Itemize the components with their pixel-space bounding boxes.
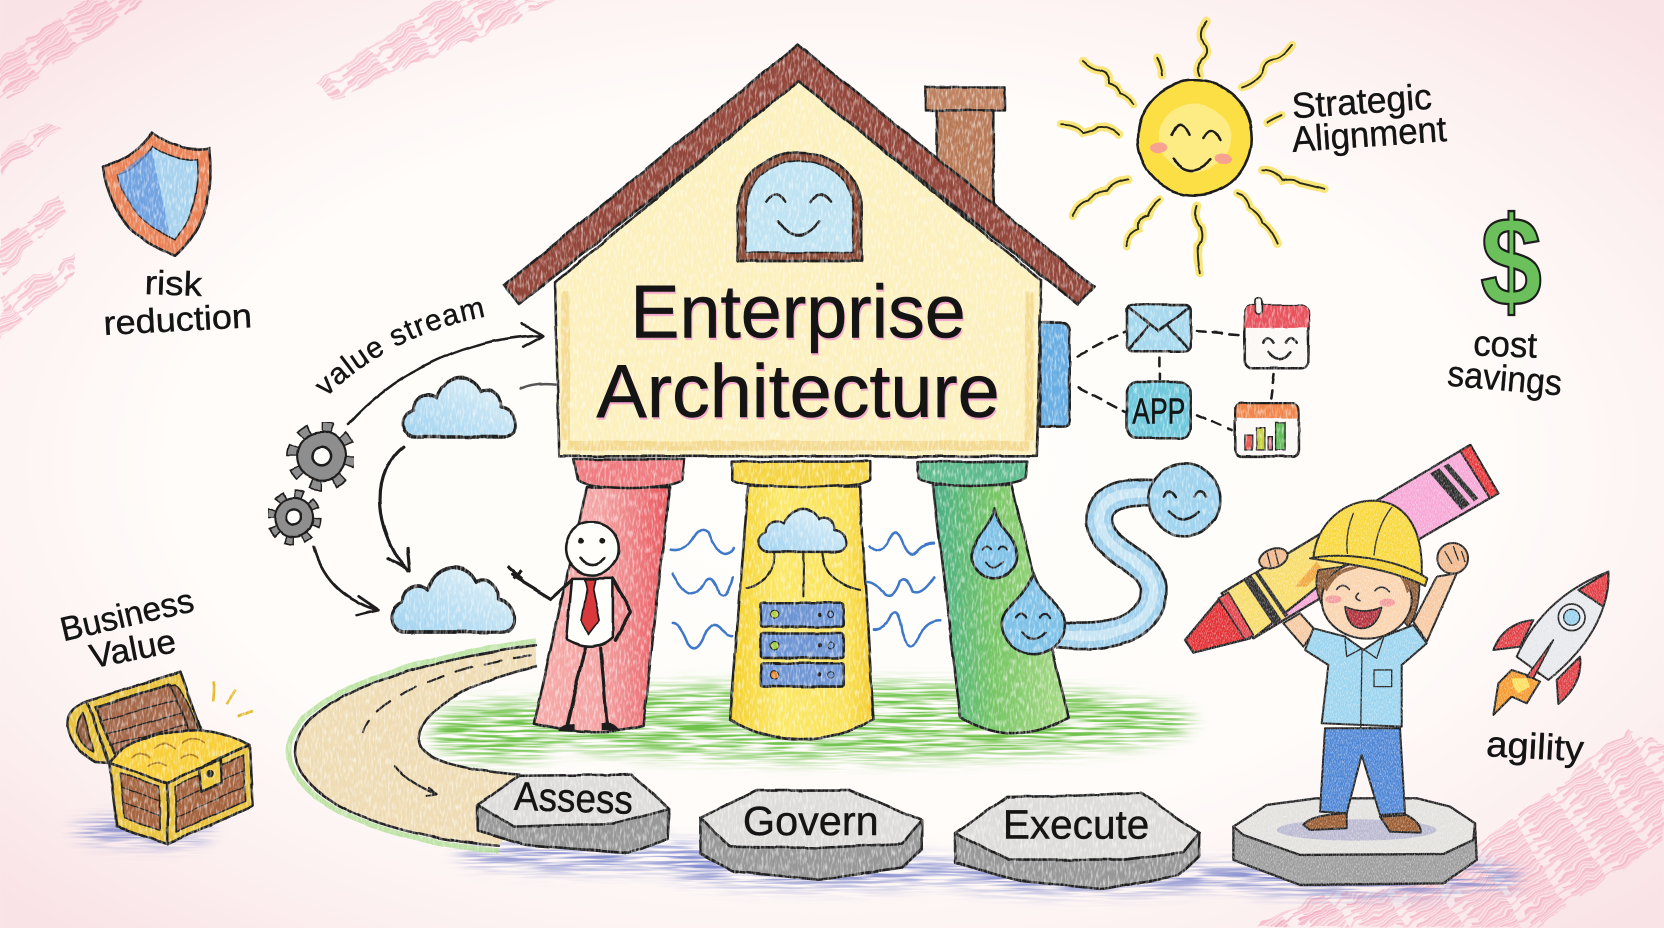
icon: treasure chest (68, 672, 253, 844)
stepping stone: assess (478, 773, 670, 853)
figure: builder with giant crayon on a stone (1185, 445, 1498, 885)
icon: server rack (761, 603, 844, 687)
label: business value: Value (86, 622, 179, 676)
label: strategic alignment: Alignment (1290, 108, 1448, 160)
boy head with hard hat (1295, 501, 1427, 639)
giant crayon (1185, 445, 1498, 653)
blue connector port (1040, 323, 1070, 427)
boy body: shirt and pants (1303, 625, 1427, 833)
panel: house (504, 45, 1094, 456)
stone shape (700, 791, 922, 880)
title: Enterprise (630, 269, 966, 353)
icon: app tile (1127, 382, 1191, 438)
ground: stone shadows (74, 818, 1523, 895)
label: govern: Govern (743, 798, 879, 844)
label: strategic alignment: Strategic (1290, 76, 1433, 126)
boy arms and hands (1256, 543, 1468, 647)
arrows to lower cloud (314, 446, 410, 615)
blue signal waves (671, 530, 940, 648)
label: risk reduction (103, 264, 253, 343)
panel: house pillars (534, 459, 1069, 740)
icon: bar chart window (1235, 403, 1299, 456)
ground: grass (430, 683, 1194, 762)
stone platform (1233, 798, 1477, 885)
icon: cloud on yellow pillar (747, 509, 860, 596)
dashed connectors (1078, 331, 1275, 430)
house wall (555, 81, 1041, 456)
chimney (925, 87, 1005, 207)
label: cost savings (1446, 322, 1564, 403)
arrow: value stream to house (348, 324, 556, 424)
icon: smiling sun (1061, 21, 1324, 274)
panel: business value (57, 582, 253, 844)
label: assess: Assess (513, 773, 634, 823)
label: cost savings: cost (1473, 322, 1538, 366)
label: risk reduction: reduction (103, 297, 253, 343)
label: risk reduction: risk (144, 264, 204, 304)
label: value stream: value stream (315, 302, 484, 394)
stepping stone: execute (955, 793, 1199, 889)
water tube and drops (972, 464, 1220, 654)
label: app: APP (1132, 390, 1185, 431)
panel: risk reduction (103, 133, 253, 343)
icon: shield (103, 133, 211, 256)
pillar: green (918, 462, 1069, 733)
icon: upper cloud (403, 378, 516, 437)
stone shape (478, 775, 670, 853)
title: Architecture (596, 349, 1000, 433)
label: business value: Business (57, 582, 197, 649)
label: strategic alignment (1290, 76, 1448, 160)
panel: cost savings (1446, 191, 1564, 403)
stepping stone: govern (700, 791, 922, 880)
icon: dollar sign: $ (1480, 191, 1542, 333)
panel: agility (1485, 572, 1608, 769)
label: cost savings: savings (1446, 353, 1564, 403)
winding road (289, 641, 541, 851)
panel: strategic alignment sun (1061, 21, 1448, 274)
panel: value stream flow (268, 302, 557, 634)
icon: smiling calendar (1245, 298, 1308, 368)
icon: rocket (1493, 572, 1608, 715)
panel: connected app icons (1078, 298, 1308, 456)
label: agility: agility (1485, 723, 1585, 769)
pillar: yellow (730, 462, 873, 740)
icon: envelope (1127, 305, 1191, 351)
stone shape (955, 793, 1199, 889)
icon: lower cloud (391, 568, 515, 632)
title (596, 269, 1000, 433)
roof (504, 45, 1094, 305)
label: execute: Execute (1003, 801, 1149, 847)
window with smiling face (738, 152, 862, 261)
figure: stick man in tie (507, 522, 631, 731)
pillar: red (534, 459, 684, 732)
icon: gears (273, 429, 349, 539)
